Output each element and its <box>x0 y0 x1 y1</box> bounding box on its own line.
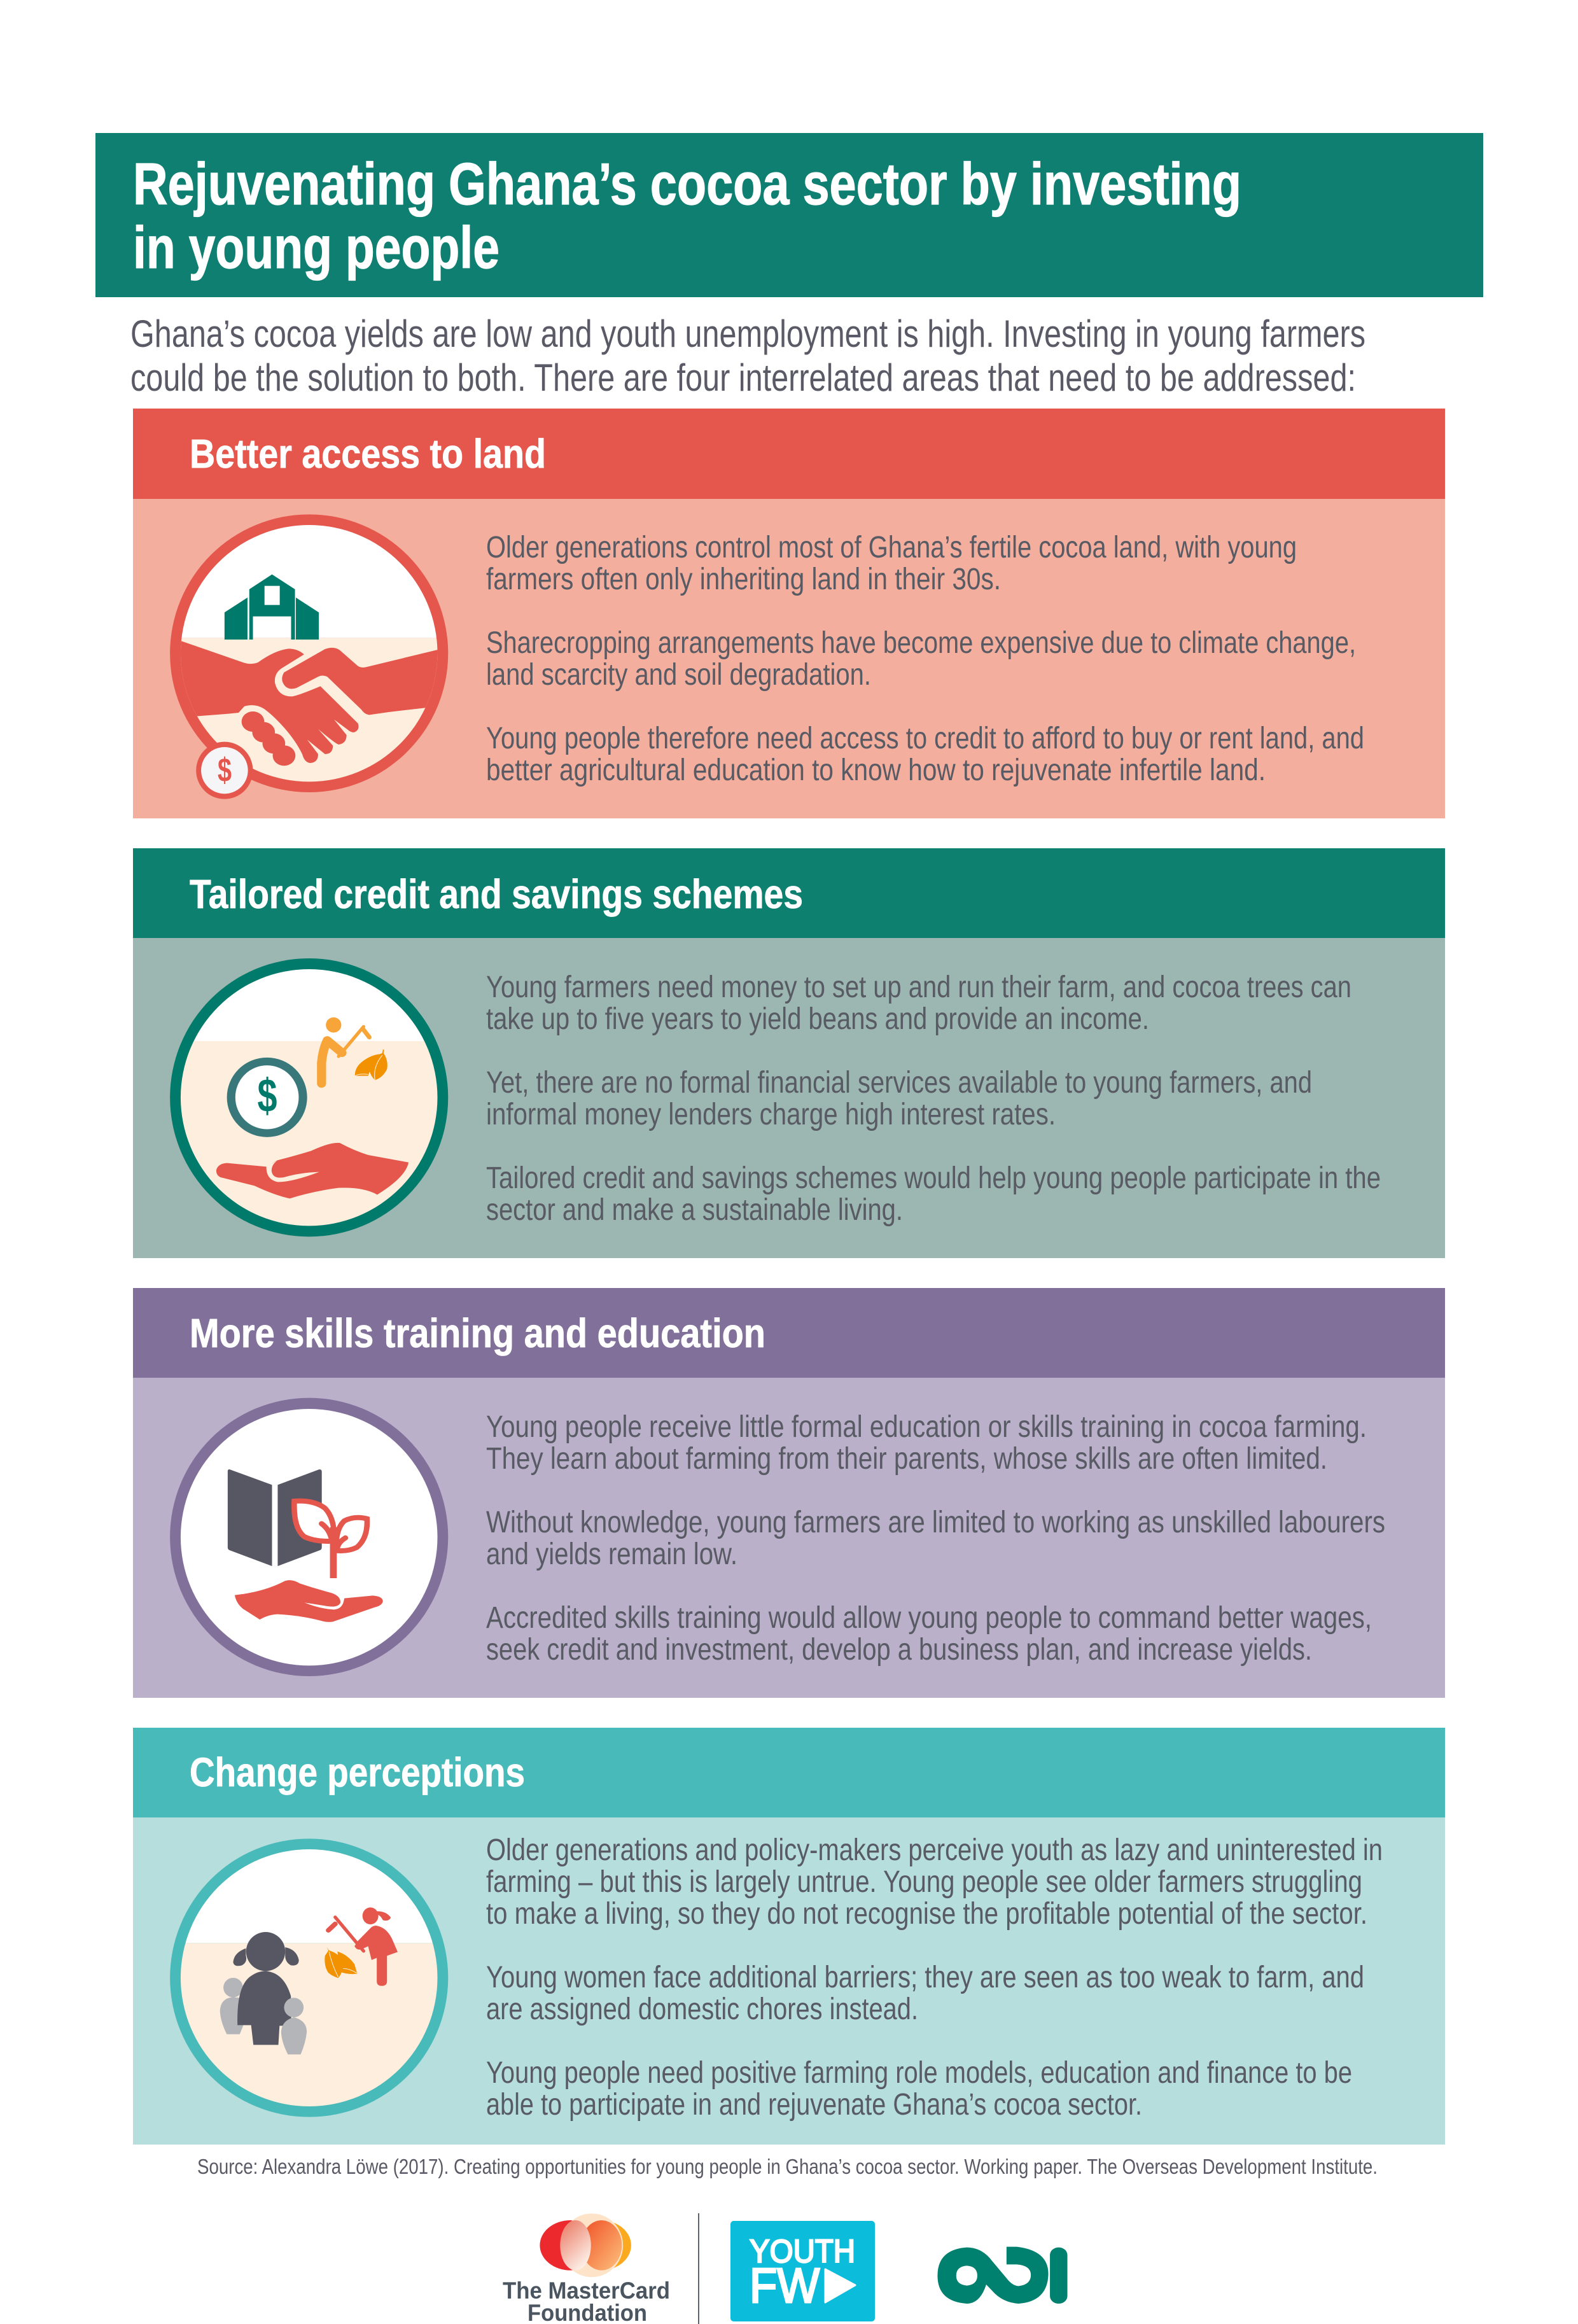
text block: skills: Accredited skills training would allow young people to command better wages, <box>486 1601 1372 1635</box>
text block: perceptions: Young women face additional barriers; they are seen as too weak to farm, and <box>486 1961 1364 1994</box>
text block: perceptions: to make a living, so they do not recognise the profitable potential of the sector. <box>486 1897 1367 1931</box>
text block: credit: sector and make a sustainable living. <box>486 1193 903 1227</box>
panel: change perceptions <box>133 1728 1445 2145</box>
icon: coin, hand and farmer <box>170 956 448 1236</box>
text block: skills: and yields remain low. <box>486 1537 737 1571</box>
text block: credit: informal money lenders charge high interest rates. <box>486 1098 1056 1131</box>
text block: land: better agricultural education to know how to rejuvenate infertile land. <box>486 753 1266 787</box>
text block: land: Older generations control most of Ghana’s fertile cocoa land, with young <box>486 531 1297 564</box>
icon: dollar coin: $ <box>218 752 232 789</box>
logo: Youth FW: YOUTH <box>750 2233 855 2269</box>
text block: perceptions: farming – but this is largely untrue. Young people see older farmers struggling <box>486 1865 1362 1899</box>
panel heading: skills training <box>133 1288 1445 1378</box>
text block: credit: Young farmers need money to set up and run their farm, and cocoa trees can <box>486 970 1351 1004</box>
text block: perceptions: able to participate in and rejuvenate Ghana’s cocoa sector. <box>486 2088 1142 2122</box>
text block: skills: Young people receive little formal education or skills training in cocoa farming. <box>486 1410 1367 1444</box>
title <box>133 151 1241 281</box>
text block: land: Young people therefore need access to credit to afford to buy or rent land, and <box>486 722 1364 755</box>
text block: perceptions: are assigned domestic chores instead. <box>486 1992 918 2026</box>
text block: credit: Tailored credit and savings schemes would help young people participate in the <box>486 1161 1381 1195</box>
panel: better access to land <box>133 409 1445 818</box>
panel heading: better access to land <box>133 409 1445 499</box>
panel: tailored credit and savings schemes <box>133 848 1445 1258</box>
icon: barn and handshake <box>168 514 450 792</box>
panel: more skills training and education <box>133 1288 1445 1698</box>
logo: The MasterCard Foundation: The MasterCard <box>503 2278 670 2304</box>
intro text <box>130 312 1365 399</box>
title banner <box>95 133 1483 297</box>
text block: credit: Yet, there are no formal financial services available to young farmers, and <box>486 1066 1312 1100</box>
text block: skills: Without knowledge, young farmers are limited to working as unskilled labourers <box>486 1506 1385 1539</box>
text block: skills <box>486 1410 1385 1667</box>
logo: Youth FW: FW <box>750 2258 820 2313</box>
logo: Youth FW <box>730 2221 875 2321</box>
panel heading: tailored credit <box>133 848 1445 938</box>
panel heading: change perceptions: Change perceptions <box>190 1749 525 1795</box>
text block: land: land scarcity and soil degradation. <box>486 658 871 692</box>
text block: credit: take up to five years to yield beans and provide an income. <box>486 1002 1149 1036</box>
panel heading: better access to land: Better access to land <box>190 431 546 477</box>
text block: skills: seek credit and investment, develop a business plan, and increase yields. <box>486 1633 1312 1667</box>
title: Rejuvenating Ghana’s cocoa sector by investing <box>133 151 1241 217</box>
text block: land: farmers often only inheriting land in their 30s. <box>486 563 1001 596</box>
icon: girl, children and woman farmer <box>170 1838 448 2117</box>
text block: land <box>486 531 1364 787</box>
text block: skills: They learn about farming from their parents, whose skills are often limited. <box>486 1442 1327 1476</box>
source line: Source: Alexandra Löwe (2017). Creating opportunities for young people in Ghana’s cocoa sector. Working paper. The Overseas Development Institute. <box>197 2155 1378 2178</box>
text block: perceptions <box>486 1833 1383 2122</box>
panel heading: skills training: More skills training and education <box>190 1310 765 1356</box>
title: in young people <box>133 214 499 281</box>
icon: dollar coin <box>196 742 253 799</box>
panel heading: change perceptions <box>133 1728 1445 1817</box>
text block: land: Sharecropping arrangements have become expensive due to climate change, <box>486 626 1356 660</box>
icon: book, sprout and hand <box>170 1398 448 1676</box>
text block: credit <box>486 970 1381 1227</box>
text block: perceptions: Older generations and policy-makers perceive youth as lazy and uninterested in <box>486 1833 1383 1867</box>
dollar sign: $ <box>257 1069 277 1122</box>
logo: The MasterCard Foundation <box>503 2213 670 2324</box>
text block: perceptions: Young people need positive farming role models, education and finance to be <box>486 2056 1352 2090</box>
logo: ODI <box>937 2247 1068 2304</box>
panel heading: tailored credit: Tailored credit and savings schemes <box>190 871 803 917</box>
